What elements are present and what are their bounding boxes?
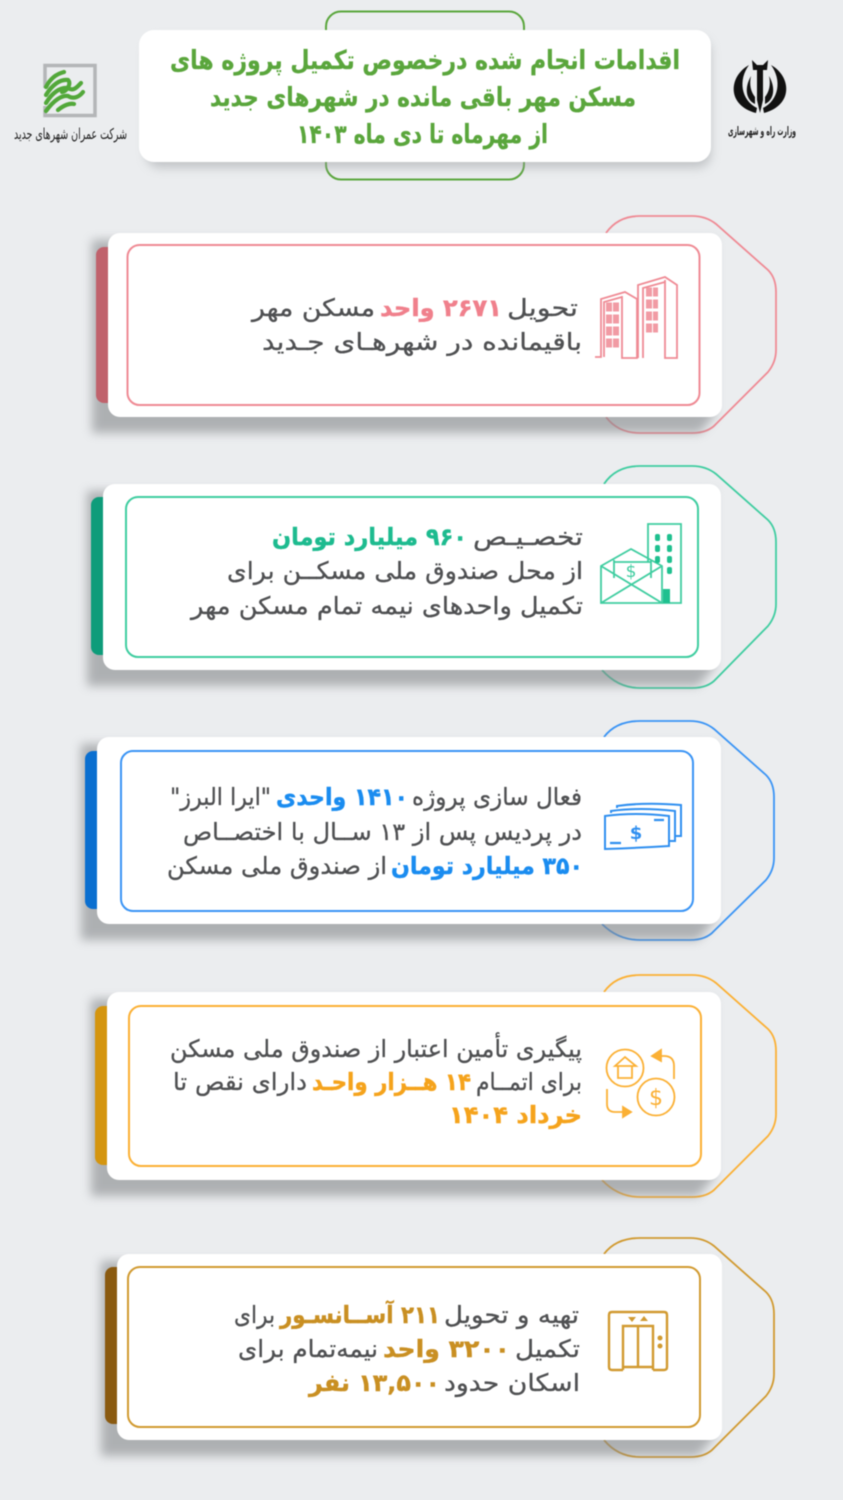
text: elevators: ۳۲۰۰ واحد: [383, 1335, 510, 1363]
text: follow-up: پیگیری تأمین اعتبار از صندوق ملی مسکن: [170, 1032, 582, 1063]
text: activation: ۱۴۱۰ واحدی: [276, 783, 408, 811]
text: delivery: ۲۶۷۱ واحد: [380, 294, 502, 322]
inner border 5: [128, 1267, 700, 1427]
title: اقدامات انجام شده درخصوص تکمیل پروژه های: [170, 46, 680, 76]
header: [139, 12, 711, 180]
header green outline: [326, 12, 524, 180]
tab 3: [85, 751, 115, 909]
inner border 4: [129, 1006, 701, 1166]
white card 4: [107, 992, 721, 1180]
text: elevators: ۲۱۱ آســانسـور: [279, 1300, 440, 1329]
panel: card 1 delivery: [92, 216, 776, 433]
text: funding: تکمیل واحدهای نیمه تمام مسکن مهر: [190, 592, 583, 620]
icon: banknotes: $: [630, 823, 642, 844]
outline hexagon 5: [604, 1238, 774, 1457]
panel: card 2 funding: [87, 466, 776, 688]
panel: card 3 activation: [81, 721, 774, 940]
text: funding: تخصـیـص: [473, 523, 583, 551]
tab 1: [96, 247, 126, 403]
text: elevators: تکمیل: [515, 1335, 580, 1363]
text: activation: ۳۵۰ میلیارد تومان: [391, 852, 583, 880]
text: activation: "ایرا البرز": [170, 783, 271, 811]
text: activation: فعال سازی پروژه: [412, 783, 582, 811]
white card 2: [103, 484, 721, 670]
icon: envelope and building: $: [626, 562, 636, 582]
text: funding: از محل صندوق ملی مسکــن برای: [227, 557, 583, 585]
text: follow-up: خرداد ۱۴۰۴: [449, 1101, 582, 1129]
shadow 4: [91, 999, 714, 1196]
text: activation: [167, 783, 583, 880]
text: elevators: [234, 1300, 580, 1397]
outline hexagon 4: [602, 975, 776, 1197]
text: elevators: نیمه‌تمام برای: [238, 1335, 378, 1363]
outline hexagon 3: [602, 721, 774, 940]
outline hexagon 1: [606, 216, 776, 433]
logo: ministry emblem: [728, 60, 796, 139]
text: elevators: تهیه و تحویل: [444, 1301, 579, 1329]
text: delivery: مسکن مهر: [251, 294, 375, 322]
panel: card 5 elevators: [101, 1238, 774, 1457]
inner border 3: [121, 751, 693, 911]
icon: elevator: [609, 1312, 667, 1370]
outline hexagon 2: [602, 466, 776, 688]
panel: card 4 follow-up: [91, 975, 776, 1197]
inner border 2: [126, 497, 698, 657]
shadow 3: [81, 744, 714, 940]
text: elevators: اسکان حدود: [444, 1369, 580, 1397]
header panel: [139, 30, 711, 162]
text: activation: در پردیس پس از ۱۳ ســال با اختصــاص: [183, 818, 582, 846]
tab 2: [91, 497, 121, 655]
white card 5: [117, 1254, 722, 1440]
white card 1: [108, 233, 722, 417]
text: follow-up: [170, 1032, 582, 1129]
icon: banknotes: [605, 804, 681, 849]
text: delivery: تحویل: [507, 294, 578, 322]
text: elevators: ۱۳,۵۰۰ نفر: [308, 1369, 440, 1397]
icon: house and dollar exchange: $: [649, 1086, 663, 1111]
text: funding: ۹۶۰ میلیارد تومان: [272, 523, 467, 551]
logo: new towns company: [14, 66, 127, 143]
text: elevators: برای: [234, 1301, 275, 1329]
text: delivery: باقیمانده در شهرهـای جـدید: [262, 328, 582, 356]
title: از مهرماه تا دی ماه ۱۴۰۳: [297, 120, 548, 150]
icon: envelope and building: [601, 524, 681, 603]
title: مسکن مهر باقی مانده در شهرهای جدید: [210, 83, 636, 113]
header shadow: [146, 38, 711, 168]
title: [170, 46, 680, 150]
text: follow-up: ۱۴ هــزار واحـد: [312, 1068, 471, 1096]
text: activation: از صندوق ملی مسکن: [167, 852, 387, 880]
shadow 1: [92, 240, 715, 433]
logo: new towns company: شرکت عمران شهرهای جدید: [14, 125, 127, 143]
shadow 2: [87, 491, 714, 686]
icon: house and dollar exchange: [606, 1050, 674, 1117]
inner border 1: [128, 245, 700, 405]
tab 5: [105, 1267, 135, 1424]
text: delivery: [251, 294, 582, 356]
white card 3: [97, 737, 721, 924]
shadow 5: [101, 1261, 714, 1456]
text: follow-up: دارای نقص تا: [173, 1068, 307, 1096]
icon: buildings: [595, 277, 677, 358]
text: follow-up: برای اتمــام: [476, 1068, 582, 1096]
tab 4: [95, 1006, 125, 1165]
text: funding: [190, 523, 583, 620]
